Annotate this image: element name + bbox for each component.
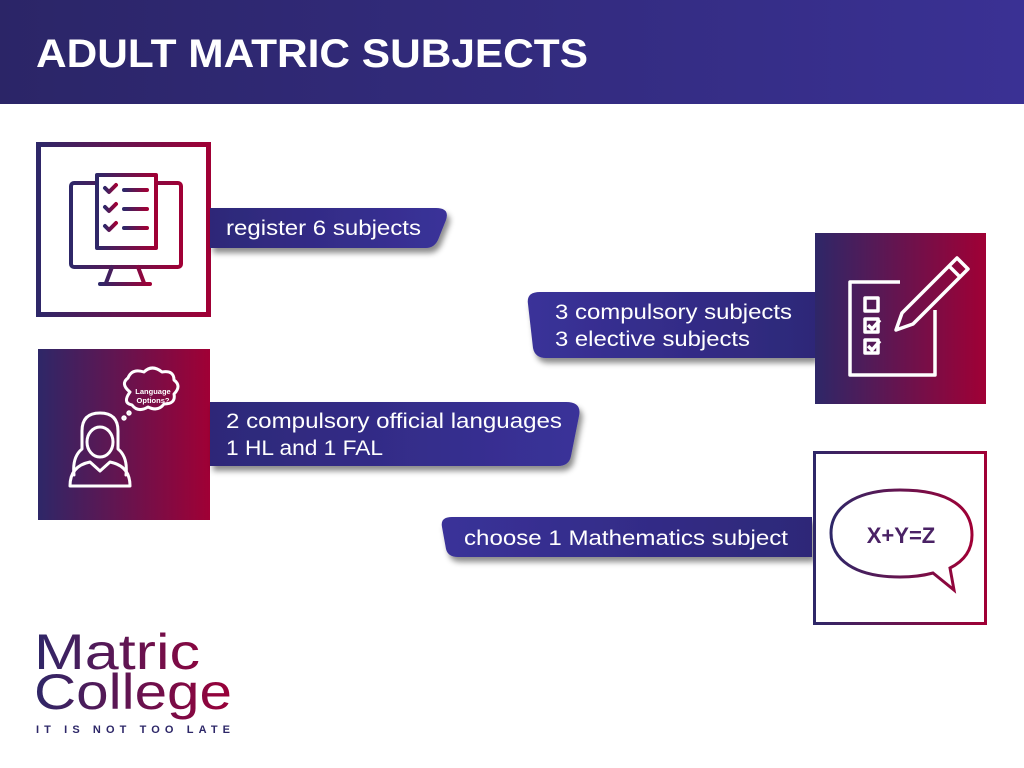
- icon box: checklist with pencil: [815, 233, 986, 404]
- banner: compulsory/elective: 3 compulsory subjects: [555, 300, 792, 324]
- banner: official languages: 2 compulsory official languages: [226, 409, 562, 433]
- title: ADULT MATRIC SUBJECTS: [36, 32, 588, 76]
- logo: Matric: [34, 624, 200, 680]
- banner: mathematics: choose 1 Mathematics subject: [464, 526, 788, 550]
- panel: compulsory and elective: [528, 233, 986, 404]
- header bar: [0, 0, 1024, 104]
- icon box: speech bubble equation: X+Y=Z: [867, 523, 935, 548]
- panel: register 6 subjects: [38, 144, 447, 314]
- icon box: speech bubble equation: [814, 452, 986, 624]
- banner: register 6 subjects: [210, 208, 447, 248]
- icon box: person thinking: [38, 349, 210, 520]
- panel: official languages: [38, 349, 579, 520]
- banner: compulsory/elective: [528, 292, 815, 358]
- icon box: person thinking: Language: [135, 387, 171, 396]
- icon box: computer checklist: [38, 144, 208, 314]
- banner: official languages: [210, 402, 579, 466]
- banner: mathematics: [442, 517, 812, 557]
- panel: mathematics: [442, 452, 986, 624]
- logo: College: [34, 664, 232, 720]
- icon box: person thinking: Options?: [137, 396, 170, 405]
- tagline: IT IS NOT TOO LATE: [36, 724, 230, 736]
- banner: official languages: 1 HL and 1 FAL: [226, 436, 383, 460]
- banner: compulsory/elective: 3 elective subjects: [555, 327, 750, 351]
- banner: register 6 subjects: register 6 subjects: [226, 216, 421, 240]
- logo: [34, 624, 232, 736]
